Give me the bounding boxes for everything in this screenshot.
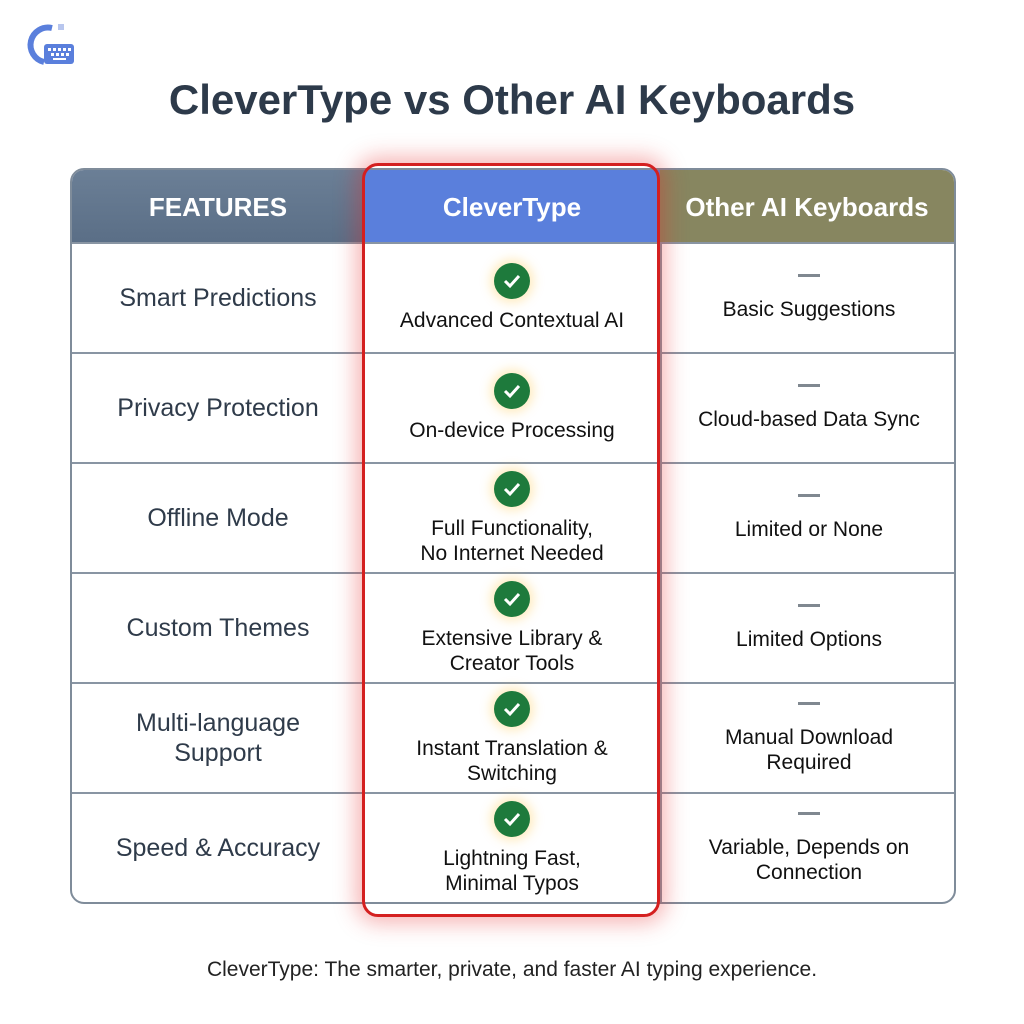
logo icon: [28, 24, 74, 65]
row: themes: [72, 572, 954, 684]
header: others: Other AI Keyboards: [685, 192, 929, 222]
row: offline: Limited or None: [735, 518, 883, 541]
row: themes: Custom Themes: [127, 614, 309, 642]
row: themes: Creator Tools: [450, 652, 574, 674]
row: speed: Lightning Fast,: [443, 846, 581, 870]
row: privacy: Privacy Protection: [117, 394, 319, 422]
row: smart predictions: Basic Suggestions: [723, 298, 895, 321]
row: languages: Switching: [467, 762, 557, 784]
row: smart predictions: Smart Predictions: [119, 284, 317, 312]
title: CleverType vs Other AI Keyboards: [169, 76, 855, 123]
row: offline: No Internet Needed: [420, 542, 604, 564]
row: speed: Variable, Depends on: [709, 836, 909, 858]
comparison table: [70, 168, 956, 904]
row: speed: [72, 792, 954, 904]
row: offline: Full Functionality,: [431, 516, 593, 540]
row: smart predictions: Advanced Contextual AI: [400, 309, 624, 332]
row: themes: Limited Options: [736, 628, 882, 651]
row: speed: Connection: [756, 860, 862, 884]
header: features: [72, 170, 364, 244]
row: themes: Extensive Library &: [422, 626, 602, 650]
header: clevertype: [364, 170, 660, 244]
row: languages: Instant Translation &: [416, 736, 608, 760]
row: privacy: On-device Processing: [409, 419, 615, 442]
row: offline: [72, 462, 954, 574]
row: languages: Support: [174, 739, 262, 767]
row: speed: Minimal Typos: [445, 872, 579, 894]
header: features: FEATURES: [149, 192, 287, 222]
row: languages: Manual Download: [725, 726, 893, 748]
row: privacy: Cloud-based Data Sync: [698, 408, 920, 431]
footer tagline: CleverType: The smarter, private, and faster AI typing experience.: [207, 958, 817, 981]
header: clevertype: CleverType: [443, 192, 581, 222]
row: languages: [72, 682, 954, 794]
row: languages: Required: [766, 750, 852, 774]
row: speed: Speed & Accuracy: [116, 834, 320, 862]
row: smart predictions: [72, 242, 954, 354]
row: languages: Multi-language: [136, 709, 300, 737]
row: offline: Offline Mode: [147, 504, 289, 532]
highlight frame: [362, 163, 660, 917]
row: privacy: [72, 352, 954, 464]
header: others: [660, 170, 954, 244]
